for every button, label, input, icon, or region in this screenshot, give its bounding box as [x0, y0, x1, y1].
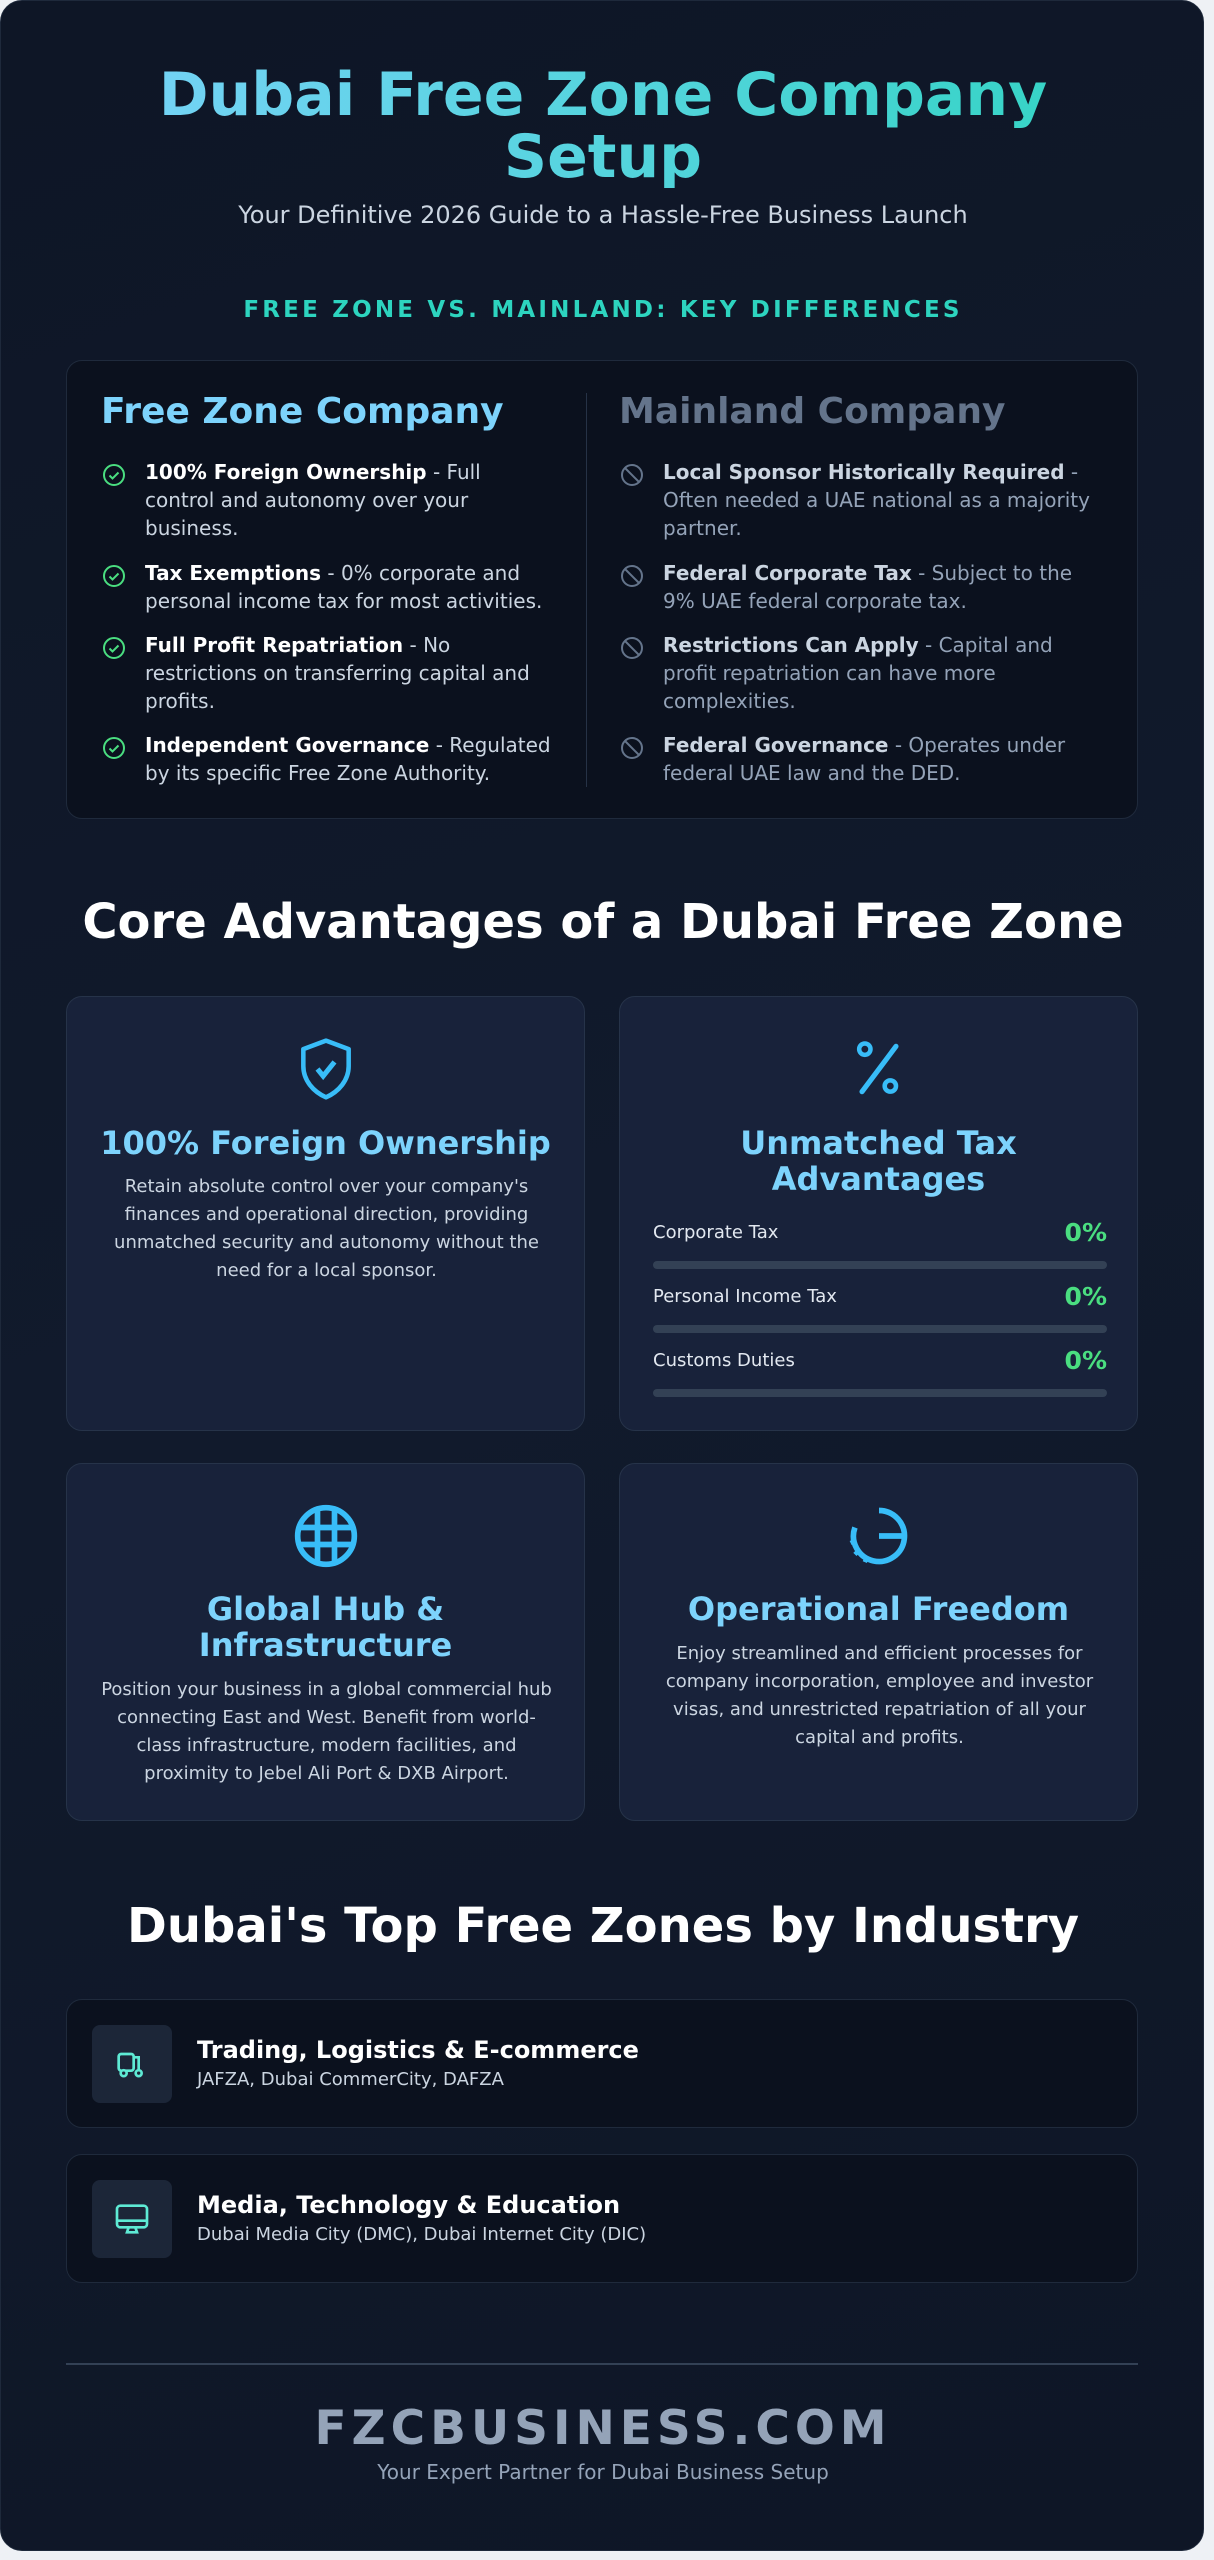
tax row: customs: Customs Duties	[653, 1350, 795, 1371]
subtitle: Your Definitive 2026 Guide to a Hassle-Free Business Launch	[238, 201, 968, 229]
list item: federal governance: Federal Governance - Operates under federal UAE law and the DED.	[663, 733, 1065, 785]
row title: Media, Technology & Education	[197, 2191, 620, 2219]
list item: restrictions: Restrictions Can Apply - Capital and profit repatriation can have more complexities.	[663, 633, 1053, 713]
row text: Dubai Media City (DMC), Dubai Internet City (DIC)	[197, 2224, 646, 2245]
industry row: trading	[66, 1999, 1138, 2128]
card text: Retain absolute control over your company's finances and operational direction, providing unmatched security and autonomy without the need for a local sponsor.	[114, 1176, 539, 1281]
heading: free zone company: Free Zone Company	[101, 391, 504, 432]
tax row: personal income	[653, 1282, 1107, 1333]
heading: top free zones: Dubai's Top Free Zones by Industry	[127, 1898, 1079, 1954]
title	[1, 64, 1205, 188]
card title: 100% Foreign Ownership	[100, 1124, 551, 1162]
icon: percent	[856, 1041, 899, 1094]
tax row: customs: 0%	[1065, 1346, 1107, 1375]
card text: Enjoy streamlined and efficient processes for company incorporation, employee and investor visas, and unrestricted repatriation of all your capital and profits.	[666, 1643, 1093, 1748]
card title: Operational Freedom	[688, 1590, 1069, 1628]
column: mainland	[619, 391, 1090, 785]
list item: repatriation: Full Profit Repatriation - No restrictions on transferring capital and profits.	[145, 633, 530, 713]
row title: Trading, Logistics & E-commerce	[197, 2036, 639, 2064]
icon: monitor	[92, 2180, 172, 2258]
heading: core advantages: Core Advantages of a Dubai Free Zone	[82, 894, 1124, 950]
panel: operational freedom	[619, 1463, 1138, 1821]
footer tagline: Your Expert Partner for Dubai Business Setup	[377, 2460, 829, 2484]
tax row: customs	[653, 1346, 1107, 1397]
icon: globe	[294, 1504, 358, 1568]
card text: Position your business in a global commercial hub connecting East and West. Benefit from world-class infrastructure, modern facilities, and proximity to Jebel Ali Port & DXB Airport.	[101, 1679, 552, 1784]
list item: tax: Tax Exemptions - 0% corporate and personal income tax for most activities.	[145, 561, 542, 613]
list item: sponsor: Local Sponsor Historically Required - Often needed a UAE national as a majority partner.	[663, 460, 1090, 540]
card title	[740, 1124, 1017, 1198]
card title	[199, 1590, 452, 1664]
list item: corporate tax: Federal Corporate Tax - Subject to the 9% UAE federal corporate tax.	[663, 561, 1072, 613]
panel: foreign ownership	[66, 996, 585, 1431]
icon: truck	[92, 2025, 172, 2103]
icon: gear-clock	[850, 1508, 908, 1564]
industry row: media	[66, 2154, 1138, 2283]
title: Setup	[504, 122, 702, 192]
section kicker: free zone vs mainland: FREE ZONE VS. MAINLAND: KEY DIFFERENCES	[243, 297, 963, 323]
card title: Advantages	[772, 1160, 985, 1198]
column: free zone	[101, 391, 551, 785]
tax row: corporate	[653, 1218, 1107, 1269]
panel: comparison	[66, 360, 1138, 819]
icon: shield check	[301, 1038, 351, 1100]
card title: Global Hub &	[207, 1590, 444, 1628]
heading: mainland company: Mainland Company	[619, 391, 1005, 432]
list item: governance: Independent Governance - Regulated by its specific Free Zone Authority.	[145, 733, 551, 785]
footer brand: FZCBUSINESS.COM	[314, 2401, 892, 2456]
title: Dubai Free Zone Company	[159, 60, 1047, 130]
panel: global hub	[66, 1463, 585, 1821]
panel: tax advantages	[619, 996, 1138, 1431]
tax row: corporate: Corporate Tax	[653, 1222, 778, 1243]
tax row: personal income: 0%	[1065, 1282, 1107, 1311]
tax row: personal income: Personal Income Tax	[653, 1286, 837, 1307]
card title: Infrastructure	[199, 1626, 452, 1664]
tax row: corporate: 0%	[1065, 1218, 1107, 1247]
list item: ownership: 100% Foreign Ownership - Full control and autonomy over your business.	[145, 460, 481, 540]
row text: JAFZA, Dubai CommerCity, DAFZA	[197, 2069, 504, 2090]
card title: Unmatched Tax	[740, 1124, 1017, 1162]
